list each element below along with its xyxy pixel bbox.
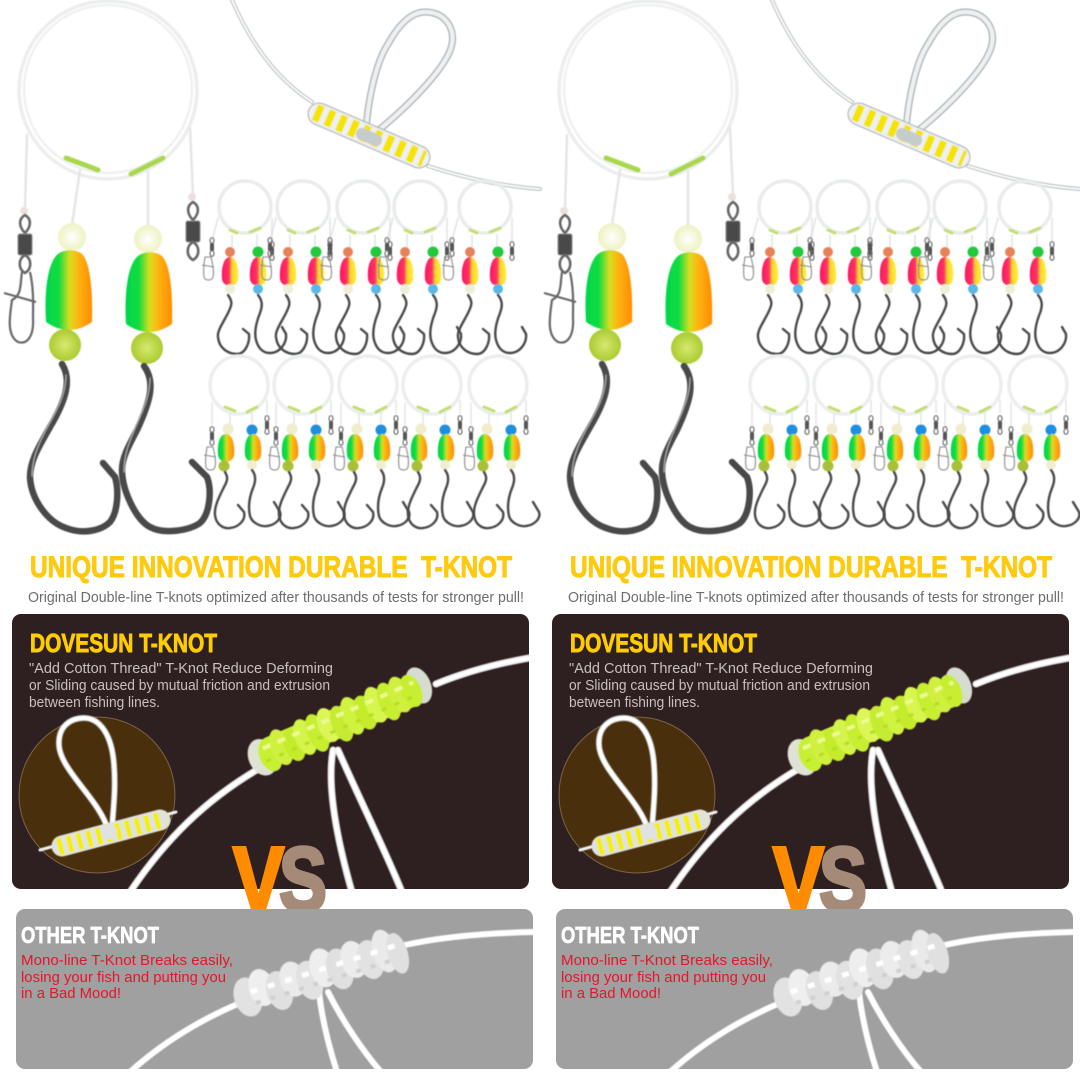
panel heading: OTHER T-KNOT bbox=[21, 922, 159, 948]
inset circle bbox=[19, 717, 175, 873]
small pink and yellow rig 5 bbox=[982, 181, 1066, 354]
small pink and yellow rig 5 bbox=[442, 181, 526, 354]
heading: UNIQUE INNOVATION DURABLE T-KNOT bbox=[30, 551, 512, 584]
panel description bbox=[569, 661, 873, 711]
panel background bbox=[556, 909, 1073, 1069]
panel description bbox=[29, 661, 333, 711]
panel description: or Sliding caused by mutual friction and extrusion bbox=[29, 678, 330, 694]
panel description: between fishing lines. bbox=[29, 695, 160, 711]
panel description: in a Bad Mood! bbox=[21, 986, 121, 1002]
small pink and yellow rig 4 bbox=[917, 181, 1001, 354]
small pink and yellow rig 2 bbox=[260, 181, 344, 354]
panel: Dovesun T-knot bbox=[552, 614, 1069, 892]
small green and orange rig 5 bbox=[1003, 356, 1079, 528]
clear knot closeup bbox=[227, 924, 413, 1023]
large rig with coil, floats and hooks bbox=[544, 1, 750, 531]
panel description: Mono-line T-Knot Breaks easily, bbox=[561, 953, 773, 969]
panel background bbox=[552, 614, 1069, 889]
green knot closeup bbox=[780, 663, 979, 780]
inset knot illustration bbox=[580, 718, 716, 850]
panel: other T-knot bbox=[16, 909, 533, 1072]
fishing lines bbox=[130, 658, 529, 892]
small green and orange rig 1 bbox=[744, 356, 820, 528]
large rig with coil, floats and hooks bbox=[4, 1, 210, 531]
fishing lines bbox=[670, 658, 1069, 892]
VS badge bbox=[773, 829, 867, 931]
loop line T-knot illustration bbox=[232, 0, 540, 189]
VS badge: S bbox=[819, 829, 867, 931]
panel: Dovesun T-knot bbox=[12, 614, 529, 892]
small pink and yellow rig 1 bbox=[742, 181, 826, 354]
small pink and yellow rig 3 bbox=[320, 181, 404, 354]
right column, duplicate of left bbox=[544, 0, 1080, 1072]
panel description bbox=[561, 953, 773, 1002]
VS badge: V bbox=[773, 829, 824, 931]
VS badge: S bbox=[279, 829, 327, 931]
small green and orange rig 5 bbox=[463, 356, 539, 528]
VS badge: V bbox=[233, 829, 284, 931]
small pink and yellow rig 1 bbox=[202, 181, 286, 354]
small green and orange rig 4 bbox=[397, 356, 473, 528]
inset circle bbox=[559, 717, 715, 873]
panel description: "Add Cotton Thread" T-Knot Reduce Deforming bbox=[569, 661, 873, 677]
small green and orange rig 2 bbox=[268, 356, 344, 528]
panel description bbox=[21, 953, 233, 1002]
left column bbox=[4, 0, 540, 1072]
panel description: between fishing lines. bbox=[569, 695, 700, 711]
small green and orange rig 3 bbox=[873, 356, 949, 528]
green knot closeup bbox=[240, 663, 439, 780]
clear knot closeup bbox=[767, 924, 953, 1023]
small green and orange rig 1 bbox=[204, 356, 280, 528]
panel description: losing your fish and putting you bbox=[21, 970, 226, 986]
small green and orange rig 4 bbox=[937, 356, 1013, 528]
small pink and yellow rig 3 bbox=[860, 181, 944, 354]
panel description: "Add Cotton Thread" T-Knot Reduce Deforming bbox=[29, 661, 333, 677]
small pink and yellow rig 2 bbox=[800, 181, 884, 354]
subheading: Original Double-line T-knots optimized after thousands of tests for stronger pull! bbox=[568, 589, 1064, 606]
panel description: in a Bad Mood! bbox=[561, 986, 661, 1002]
small pink and yellow rig 4 bbox=[377, 181, 461, 354]
VS badge bbox=[233, 829, 327, 931]
panel heading: DOVESUN T-KNOT bbox=[570, 628, 757, 658]
panel description: losing your fish and putting you bbox=[561, 970, 766, 986]
panel description: Mono-line T-Knot Breaks easily, bbox=[21, 953, 233, 969]
small green and orange rig 2 bbox=[808, 356, 884, 528]
fishing lines bbox=[670, 932, 1073, 1072]
loop line T-knot illustration bbox=[772, 0, 1080, 189]
inset knot illustration bbox=[40, 718, 176, 850]
panel background bbox=[12, 614, 529, 889]
panel: other T-knot bbox=[556, 909, 1073, 1072]
panel heading: OTHER T-KNOT bbox=[561, 922, 699, 948]
panel background bbox=[16, 909, 533, 1069]
fishing lines bbox=[130, 932, 533, 1072]
panel description: or Sliding caused by mutual friction and extrusion bbox=[569, 678, 870, 694]
small green and orange rig 3 bbox=[333, 356, 409, 528]
panel heading: DOVESUN T-KNOT bbox=[30, 628, 217, 658]
subheading: Original Double-line T-knots optimized after thousands of tests for stronger pull! bbox=[28, 589, 524, 606]
